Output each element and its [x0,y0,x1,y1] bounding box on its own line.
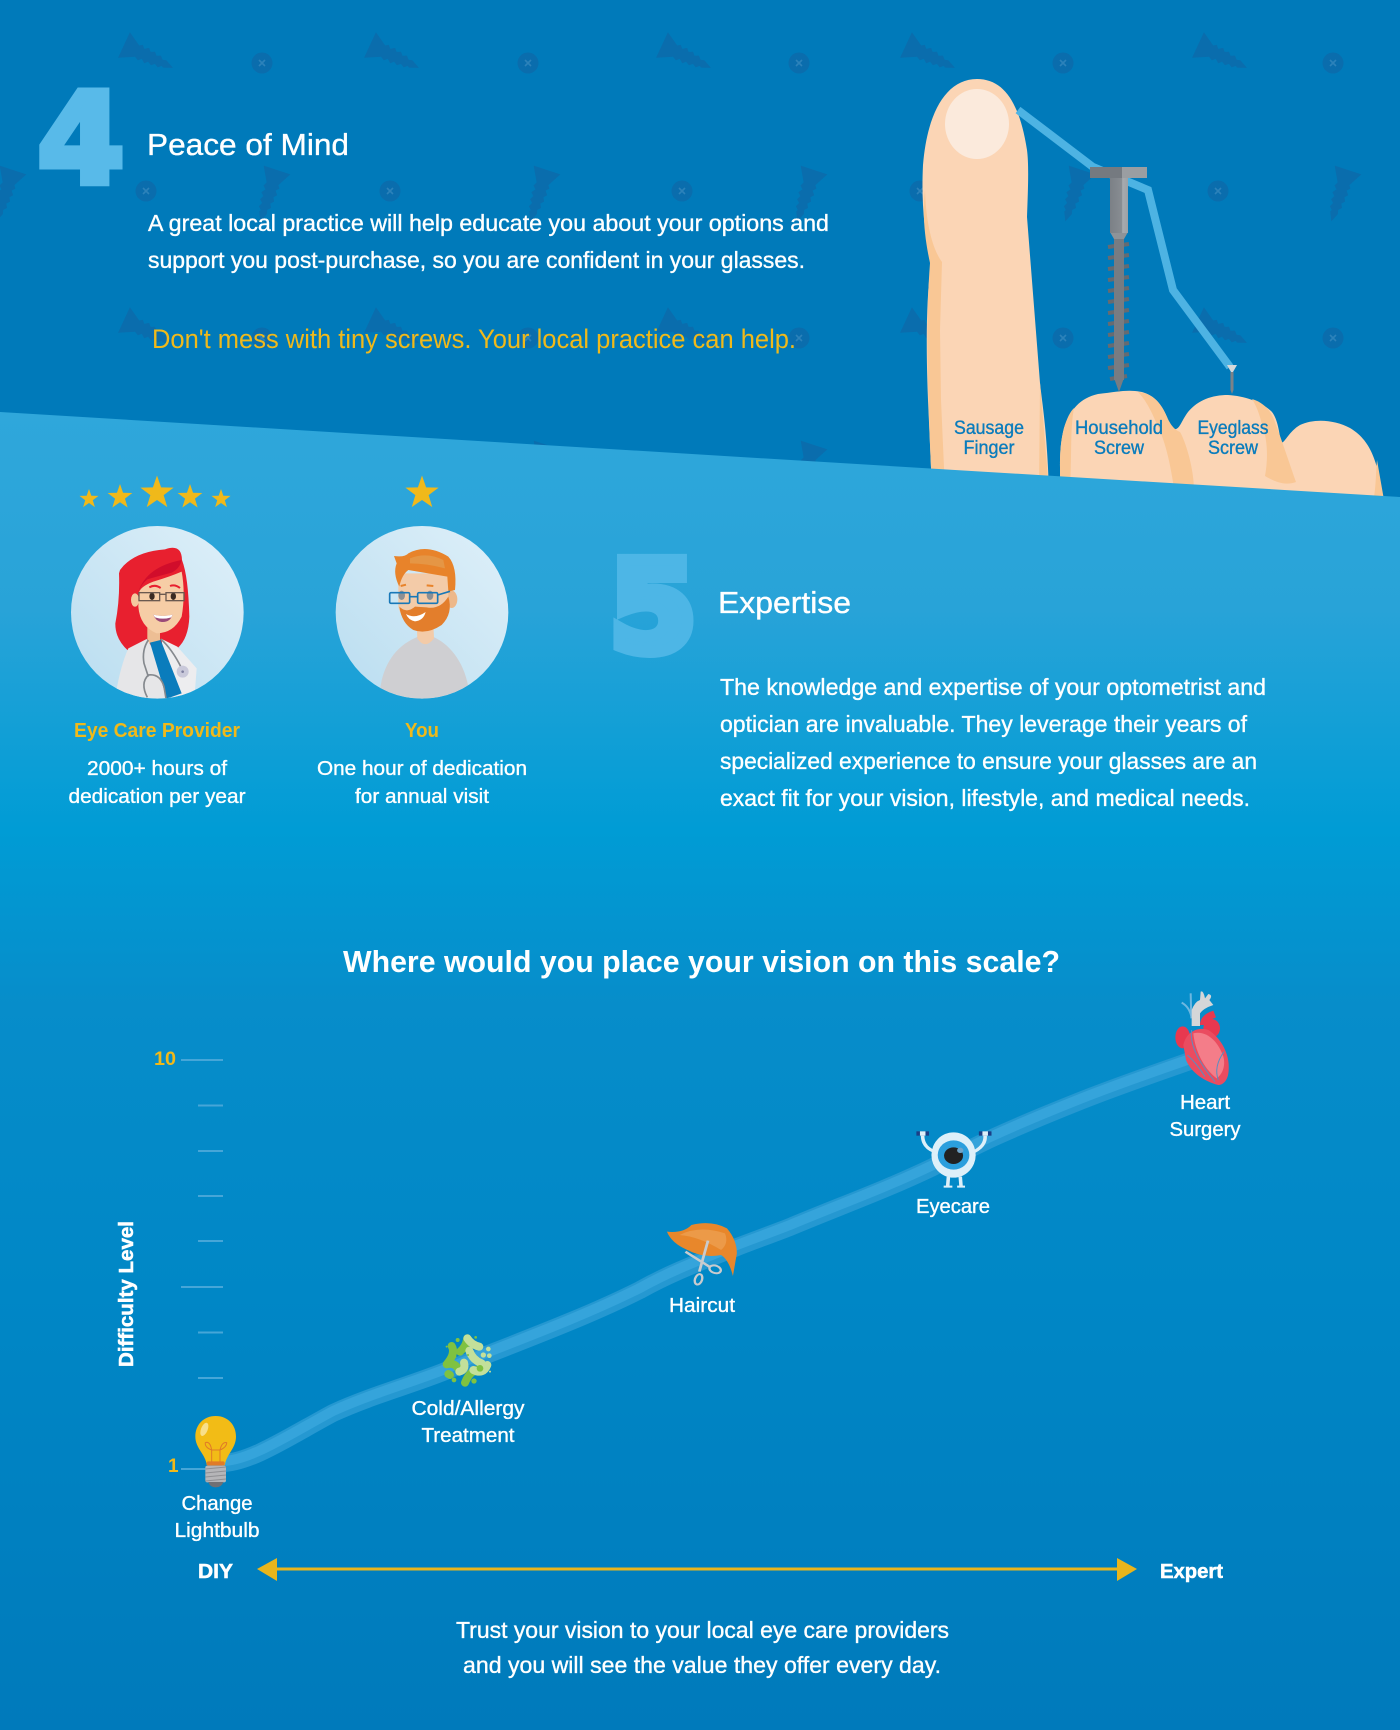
label: heart surgery [1170,1092,1240,1141]
label: change lightbulb: Change [182,1493,252,1515]
chart title: Where would you place your vision on this scale? [343,944,1060,979]
y axis label 1: 1 [168,1456,179,1477]
portrait: eye care provider [71,526,244,699]
label: cold/allergy treatment: Treatment [422,1425,515,1447]
label: eyeglass screw: Screw [1208,438,1258,459]
chart: difficulty scale [116,991,1240,1583]
other fingers [1060,391,1383,500]
caption: you: for annual visit [355,786,489,808]
caption: you [317,720,527,808]
x axis label: DIY: DIY [198,1561,234,1583]
label: eyeglass screw [1198,418,1268,459]
icon: eye with dumbbells [916,1131,992,1187]
y axis ticks [181,1060,223,1469]
label: change lightbulb [174,1493,260,1542]
closing text [456,1617,949,1678]
label: change lightbulb: Lightbulb [174,1520,260,1542]
closing text: Trust your vision to your local eye care providers [456,1617,949,1643]
caption: eye care provider: 2000+ hours of [87,758,227,780]
five star rating [79,476,231,508]
label: eyecare: Eyecare [916,1196,990,1218]
difficulty curve [222,1059,1190,1463]
label: household screw [1075,418,1163,459]
x axis label: Expert: Expert [1160,1561,1223,1583]
text block: peace of mind body [148,210,829,273]
text block: peace of mind body: support you post-purchase, so you are confident in your glasses. [148,247,805,273]
text block: expertise body [720,674,1266,811]
label: eyeglass screw: Eyeglass [1198,418,1268,439]
label: heart surgery: Heart [1180,1092,1230,1114]
text block: peace of mind body: A great local practice will help educate you about your options and [148,210,829,236]
label: haircut: Haircut [669,1295,735,1317]
y axis label 10: 10 [154,1049,176,1070]
icon: hair and scissors [667,1223,737,1285]
caption: eye care provider: dedication per year [68,786,246,808]
text block: expertise body: optician are invaluable. They leverage their years of [720,711,1248,737]
caption: eye care provider: Eye Care Provider [74,720,240,742]
caption: you: You [405,720,439,742]
label: sausage finger [954,418,1024,459]
knuckle shadows [1060,392,1384,500]
portrait: you [336,526,508,703]
comparison line [1018,110,1230,367]
big finger [922,79,1049,490]
icon: cold virus [446,1336,492,1384]
number 4: 4 [37,66,125,212]
finger shadow [924,190,945,490]
callout: tiny screws: Don't mess with tiny screws. Your local practice can help. [152,324,796,354]
text block: expertise body: specialized experience to ensure your glasses are an [720,748,1257,774]
caption: you: One hour of dedication [317,758,527,780]
label: sausage finger: Finger [964,438,1015,459]
panel: expertise section background [0,412,1400,1730]
caption: eye care provider [68,720,246,808]
screw background pattern [0,32,1361,501]
illustration: hand with sausage finger and screws [922,79,1384,500]
eyeglass screw [1227,365,1237,394]
label: cold/allergy treatment: Cold/Allergy [412,1398,524,1420]
heading: Peace of Mind: Peace of Mind [147,127,349,162]
label: sausage finger: Sausage [954,418,1024,439]
heading: Expertise: Expertise [718,585,851,620]
icon: light bulb [195,1416,236,1487]
fingernail [945,89,1009,159]
icon: heart [1175,991,1229,1085]
closing text: and you will see the value they offer every day. [463,1652,941,1678]
label: household screw: Screw [1094,438,1144,459]
text block: expertise body: exact fit for your vision, lifestyle, and medical needs. [720,785,1250,811]
text block: expertise body: The knowledge and expertise of your optometrist and [720,674,1266,700]
label: cold/allergy treatment [412,1398,524,1447]
label: heart surgery: Surgery [1170,1119,1240,1141]
label: household screw: Household [1075,418,1163,439]
one star rating [405,476,439,507]
x axis: DIY to Expert arrow [257,1558,1137,1581]
number 5: 5 [610,536,696,680]
household screw [1090,167,1147,392]
y axis title: Difficulty Level [116,1221,138,1367]
